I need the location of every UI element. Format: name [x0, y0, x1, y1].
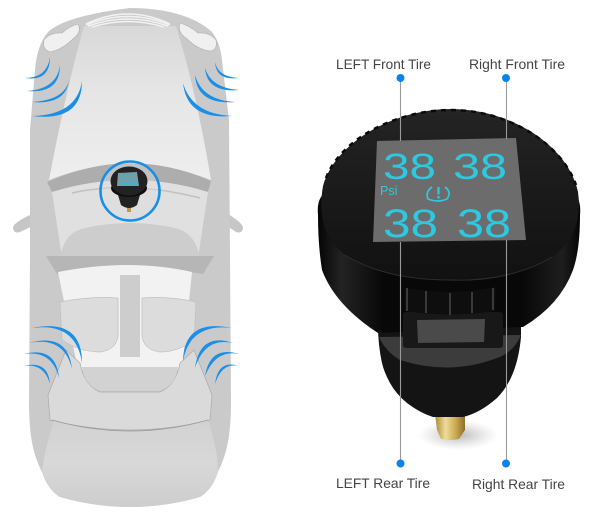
mini device callout [100, 162, 160, 220]
car body [29, 8, 231, 507]
LCD readings: 38 [457, 202, 511, 246]
stem block [403, 312, 503, 348]
sensor waves: front left [25, 57, 82, 117]
windshield interior [52, 180, 208, 258]
rear deck [48, 350, 212, 430]
headlights [44, 23, 216, 52]
sensor window [417, 319, 485, 343]
LCD readings [383, 146, 511, 246]
label: right front: Right Front Tire [469, 56, 565, 72]
trunk lid [42, 420, 218, 507]
LCD readings: 38 [383, 202, 438, 246]
windshield frame [47, 163, 211, 192]
cap edge [345, 255, 552, 280]
grey band on lower housing [379, 335, 521, 368]
LCD readings: 38 [383, 146, 436, 187]
label: left front: LEFT Front Tire [336, 56, 431, 72]
outer collar [318, 190, 580, 333]
hood [49, 26, 211, 180]
LCD screen [373, 138, 526, 242]
sensor waves: front right [183, 62, 239, 116]
unit label: Psi [380, 184, 397, 198]
label: left rear: LEFT Rear Tire [336, 475, 430, 491]
cabin floor [58, 265, 192, 370]
cap knurled rim [326, 110, 576, 185]
callout dots [396, 74, 510, 468]
header bar over rear cabin [46, 256, 214, 274]
centre console [120, 275, 140, 357]
brass valve stem [435, 414, 465, 440]
mirrors [13, 209, 243, 232]
tire warning icon [427, 187, 449, 201]
seats [60, 298, 196, 352]
sensor waves: rear left [24, 326, 82, 384]
lower housing [378, 325, 521, 417]
gear ring [404, 287, 496, 315]
dashboard [60, 223, 200, 258]
top cap [321, 109, 579, 280]
grille [86, 14, 170, 27]
callout lines [400, 78, 506, 463]
LCD readings: 38 [453, 146, 507, 187]
sensor waves: rear right [183, 326, 239, 384]
sensor device [318, 109, 580, 450]
ground shadow [418, 420, 498, 450]
car illustration [13, 8, 243, 507]
label: right rear: Right Rear Tire [472, 476, 565, 492]
